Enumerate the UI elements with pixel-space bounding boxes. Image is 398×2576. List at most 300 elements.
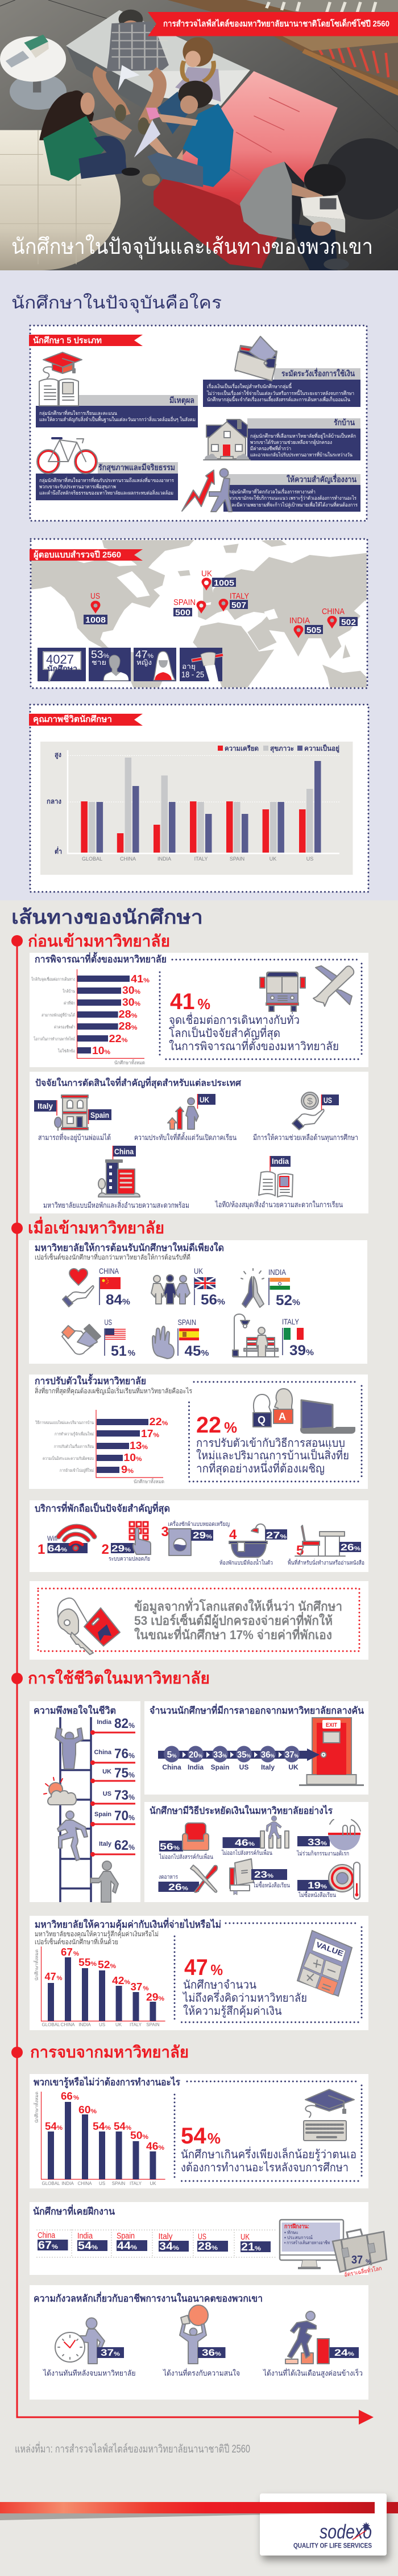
concern: job right after graduating: ได้งานทันทีหลังจบมหาวิทยาลัย [43, 2369, 136, 2377]
saving 2: travel [221, 1816, 289, 1857]
stat: age 18-25: 18 - 25 [181, 670, 204, 680]
horizontal bar chart: hardest things: การทำความรู้จักเพื่อนใหม่ [55, 1431, 94, 1437]
horizontal bar chart: 30% [122, 997, 140, 1008]
horizontal bar chart: 28% [118, 1020, 138, 1032]
service 1: wifi: Wifi [47, 1534, 57, 1542]
welcome: Spain 45% [152, 1318, 209, 1359]
text: parents pay statistic: 53 เปอร์เซ็นต์มีผู้ปกครองจ่ายค่าที่พักให้ [134, 1611, 333, 1629]
internship: Italy: 34 % [159, 2241, 179, 2253]
grouped bar chart: GLOBAL [82, 856, 102, 862]
panel: university location considerations: การพิจารณาที่ตั้งของมหาวิทยาลัย [35, 952, 167, 965]
stat: age 18-25 [180, 648, 223, 681]
service 3: washing machine [161, 1520, 230, 1556]
bar chart: value by country: INDIA [78, 2022, 91, 2027]
service 2: security: 29 % [111, 1543, 131, 1554]
welcome: US 51% [62, 1318, 135, 1359]
ladder values: 82% [114, 1716, 135, 1731]
ladder values: UK [102, 1768, 111, 1775]
ladder values: 62% [114, 1838, 135, 1853]
dropout arrow: China [162, 1763, 181, 1771]
service 3: washing machine: 3 [161, 1524, 169, 1540]
stat: 47% female [134, 648, 176, 681]
saving 1: going out [159, 1823, 213, 1861]
pin: India 505: 505 [306, 626, 321, 635]
service 5: study desk [288, 1525, 364, 1566]
horizontal bar chart: hardest things: 10% [124, 1452, 142, 1463]
pin: US 1008: US [90, 591, 100, 601]
panel: five student types [29, 326, 367, 521]
ladder values: China [94, 1749, 112, 1756]
bar chart: career clarity: GLOBAL [42, 2181, 60, 2186]
callout: 41 percent: จุดเชื่อมต่อการเดินทางกับทั่ว [169, 1012, 300, 1027]
stage heading: before university: ก่อนเข้ามหาวิทยาลัย [28, 932, 170, 950]
internship: Italy: Italy [158, 2232, 173, 2241]
ladder values: 73% [114, 1788, 135, 1803]
panel: value for money [30, 1916, 368, 2030]
bar chart: career clarity: นักศึกษาทั้งหมด [34, 2092, 39, 2123]
bar chart: career clarity: 54% [93, 2121, 111, 2132]
internship: US: 28 % [198, 2241, 218, 2253]
pin: Italy 507 [218, 591, 249, 611]
service 4: en-suite bath: 27 % [266, 1530, 287, 1541]
icon: person climbing [57, 1811, 88, 1861]
welcome: UK 56%: UK [194, 1266, 204, 1275]
internship: India [77, 2231, 107, 2252]
bar chart: value by country: 29% [146, 1991, 164, 2003]
welcome: UK 56%: 56% [201, 1292, 225, 1308]
legend [218, 744, 339, 753]
icon: person standing below ladder [90, 1861, 118, 1902]
saving 4: skip meals: งดอาหาร [159, 1874, 178, 1880]
card: careful with money: ไม่ว่าจะเป็นเรื่องค่าใช้จ่ายในแต่ละวันหรือการหนี้ในระยะยาวหลังจบการศึกษา [206, 389, 354, 396]
footer band and logo card [0, 2493, 398, 2556]
saving 2: travel: ไม่ออกไปสังสรรค์กับเพื่อน [221, 1849, 272, 1857]
welcome: India 52%: 52% [276, 1293, 300, 1308]
text: parents pay statistic: ในขณะที่นักศึกษา 17% จ่ายค่าที่พักเอง [134, 1626, 332, 1642]
panel: internships [30, 2202, 387, 2278]
stat: 4027 students: นักศึกษา [47, 664, 77, 673]
heading: student journey: เส้นทางของนักศึกษา [11, 907, 203, 928]
factor: India: ไอที0/ห้องสมุด/สิ่งอำนวยความสะดวกในการเรียน [215, 1200, 343, 1209]
pin: Italy 507: ITALY [230, 591, 249, 601]
panel: adapting to university: การปรับตัวในรั้วมหาวิทยาลัย [35, 1373, 146, 1386]
card: career focused [223, 474, 360, 512]
service 4: en-suite bath: 4 [229, 1527, 237, 1542]
icon: value calculator: VALUE [315, 1940, 345, 1958]
callout: 41 percent: ในการพิจารณาที่ตั้งของมหาวิทยาลัย [169, 1038, 339, 1053]
welcome: Italy 39%: ITALY [282, 1317, 300, 1326]
internship: UK [241, 2232, 271, 2253]
grouped bar chart: ITALY [194, 856, 208, 862]
icon: airplane [313, 966, 354, 1006]
card: career focused: ให้ความสำคัญเรื่องงาน [287, 474, 356, 484]
horizontal bar chart: โอกาสในการทำงานพาร์ทไทม์ [34, 1036, 75, 1042]
icon: briefcase 37 percent [333, 2229, 387, 2278]
service 5: study desk: พื้นที่สำหรับนั่งทำงานหรืออ่านหนังสือ [288, 1558, 364, 1566]
text: Q A: A [279, 1411, 286, 1422]
card: health and ethics [36, 462, 178, 500]
service 2: security [101, 1522, 151, 1562]
panel: internships: นักศึกษาที่เคยฝึกงาน [33, 2204, 115, 2217]
welcome: India 52% [241, 1268, 300, 1308]
bar chart: value by country: 67% [61, 1947, 79, 1958]
panel: decision factors per country: ปัจจัยในการตัดสินใจที่สำคัญที่สุดสำหรับแต่ละประเทศ [35, 1076, 242, 1089]
horizontal bar chart: ค่าครองชีพต่ำ [54, 1024, 75, 1030]
service 5: study desk: 5 [296, 1543, 304, 1558]
card: home lover: กลุ่มนักศึกษาที่เลือกมหาวิทยาลัยที่อยู่ใกล้บ้านเป็นหลัก [250, 432, 356, 439]
concern: job right after graduating [43, 2318, 136, 2377]
pin: India 505: INDIA [289, 616, 310, 626]
sodexo logo [293, 2521, 372, 2550]
panel: accommodation services: บริการที่พักถือเป็นปัจจัยสำคัญที่สุด [35, 1501, 170, 1515]
ladder values: 70% [114, 1808, 135, 1824]
stage heading: graduating: การจบจากมหาวิทยาลัย [30, 2043, 189, 2061]
callout: 54 percent: งต้องการทำงานอะไรหลังจบการศึกษา [181, 2161, 349, 2174]
factor: Italy and Spain: Spain [90, 1110, 109, 1120]
sodexo logo: sodexo [320, 2521, 372, 2543]
saving 5: textbooks: 23 % [254, 1869, 273, 1880]
concern: job right after graduating: 37 % [101, 2347, 120, 2358]
horizontal bar chart: hardest things: 13% [130, 1440, 148, 1451]
dropout arrow: 33% [213, 1750, 227, 1760]
grouped bar chart: ต่ำ [55, 846, 62, 855]
card: home lover [247, 418, 360, 460]
card: health and ethics: กลุ่มนักศึกษาที่สนใจอาหารที่ตนรับประทานรวมถึงแหล่งที่มาของอาหาร [39, 476, 174, 484]
factor: UK: ความประทับใจที่ดีตั้งแต่วันเปิดภาคเรียน [134, 1132, 237, 1142]
pin: Spain 500: SPAIN [173, 598, 196, 607]
horizontal bar chart: 22% [109, 1033, 128, 1044]
grouped bar chart: CHINA [120, 856, 136, 862]
service 5: study desk: 26 % [341, 1542, 360, 1553]
callout: 22 percent [196, 1413, 349, 1476]
icon: key and tag [57, 1598, 120, 1655]
saving 5: textbooks [230, 1859, 290, 1895]
bar chart: value by country: ITALY [130, 2022, 142, 2027]
panel: adapting to university [29, 1373, 368, 1489]
heading: who are students today: นักศึกษาในปัจจุบันคือใคร [11, 293, 222, 314]
stage heading: university life: การใช้ชีวิตในมหาวิทยาลัย [28, 1669, 210, 1687]
horizontal bar chart: 10% [92, 1045, 110, 1056]
dropout arrow: US [239, 1763, 248, 1771]
dropout arrow: 36% [261, 1750, 275, 1760]
horizontal bar chart: hardest things: 22% [149, 1416, 168, 1427]
internship: UK: UK [241, 2232, 250, 2242]
service 1: wifi: 1 [38, 1542, 45, 1557]
factor: Italy and Spain: Italy [38, 1101, 53, 1110]
grouped bar chart: SPAIN [230, 856, 244, 862]
horizontal bar chart: สามารถพักอยู่ที่บ้านได้ [42, 1012, 75, 1018]
callout: 22 percent: การปรับตัวเข้ากับวิธีการสอนแบบ [196, 1437, 345, 1450]
bar chart: value by country: 52% [98, 1959, 116, 1970]
panel: do they know what job they want: พวกเขารู้หรือไม่ว่าต้องการทำงานอะไร [34, 2076, 181, 2089]
ribbon: respondents: ผู้ตอบแบบสำรวจปี 2560 [34, 550, 121, 560]
factor: US: $ [307, 1097, 313, 1106]
saving 5: textbooks: ไม่ซื้อหนังสือเรียน [252, 1881, 290, 1889]
panel: adapting to university: สิ่งที่ยากที่สุดที่คุณต้องเผชิญเมื่อเริ่มเรียนที่มหาวิทยาลัยคืออะไร [35, 1386, 192, 1396]
bar chart: value by country: CHINA [61, 2022, 75, 2027]
panel: university location considerations [30, 952, 368, 1067]
callout: 47 percent [182, 1955, 307, 2018]
panel: student quality of life chart [29, 705, 368, 892]
saving 1: going out: 56 % [160, 1841, 180, 1852]
internship: US [197, 2232, 228, 2253]
card: health and ethics: รักสุขภาพและมีจริยธรรม [98, 463, 175, 472]
bar chart: career clarity: ITALY [130, 2181, 142, 2186]
panel: how students save money [144, 1802, 368, 1902]
legend: สุขภาวะ [270, 744, 294, 753]
icon: wallet [235, 336, 277, 381]
icon: laptop [301, 1400, 355, 1433]
text: parents pay statistic: ข้อมูลจากทั่วโลกแสดงให้เห็นว่า นักศึกษา [134, 1597, 342, 1615]
panel: value for money: เปอร์เซ็นต์ของนักศึกษาที่เห็นด้วย [35, 1937, 118, 1946]
horizontal bar chart: hardest things: ความเป็นอิสระและความรับผิดชอบ [43, 1455, 94, 1461]
panel: do they know what job they want [30, 2074, 368, 2188]
stat: 47% female: หญิง [136, 659, 152, 666]
bar chart: value by country [34, 1947, 165, 2027]
service 3: washing machine: 29 % [193, 1530, 212, 1541]
internship: India: India [77, 2231, 93, 2241]
pin: UK 1005 [201, 569, 236, 591]
horizontal bar chart: hardest things: 9% [121, 1464, 134, 1475]
bar chart: career clarity: 54% [114, 2121, 131, 2132]
icon: briefcase 37 percent: 37 % [351, 2254, 371, 2266]
horizontal bar chart: hardest things: นักศึกษาทั้งหมด [134, 1478, 164, 1484]
ribbon: five types: นักศึกษา 5 ประเภท [33, 335, 102, 345]
saving 6: heating: ไม่ซื้อหนังสือเรียน [298, 1891, 336, 1899]
stat: 53% male: 53% [91, 649, 109, 660]
ladder values: 76% [114, 1746, 135, 1762]
stat: 53% male: ชาย [92, 659, 106, 666]
ladder values: Italy [99, 1841, 112, 1847]
ladder values: US [103, 1791, 111, 1797]
factor: China [43, 1146, 189, 1209]
factor: US: US [324, 1096, 332, 1105]
callout: 47 percent: ให้ความรู้สึกคุ้มค่าเงิน [183, 2005, 282, 2018]
welcome: China 84%: CHINA [99, 1266, 119, 1275]
service 1: wifi: 64 % [48, 1543, 67, 1554]
panel: career concerns: ความกังวลหลักเกี่ยวกับอาชีพการงานในอนาคตของพวกเขา [34, 2291, 263, 2304]
dropout arrow: 35% [237, 1750, 251, 1760]
welcome: US 51%: 51% [111, 1343, 135, 1359]
bar chart: career clarity: 60% [78, 2104, 97, 2116]
panel: value for money: มหาวิทยาลัยให้ความคุ้มค่ากับเงินที่จ่ายไปหรือไม่ [35, 1917, 221, 1931]
panel: dropout rate [144, 1701, 368, 1795]
card: rational: กลุ่มนักศึกษาที่สนใจการเรียนและคะแนน [39, 409, 117, 417]
saving 3: sports [296, 1820, 360, 1857]
welcome: Italy 39%: 39% [289, 1343, 314, 1359]
text: Q A: Q [258, 1414, 266, 1426]
internship: UK: 21 % [241, 2241, 261, 2253]
ribbon: quality of life [29, 714, 143, 726]
panel: welcome by country: มหาวิทยาลัยให้การต้อนรับนักศึกษาใหม่ดีเพียงใด [35, 1242, 224, 1253]
card: career focused: และมีความพยายามที่จะก้าวไปสู่เป้าหมายเพื่อให้ได้งานที่ตนต้องการ [229, 501, 358, 508]
ribbon: five types [29, 335, 143, 346]
panel: welcome by country [29, 1240, 367, 1364]
factor: India: India [272, 1157, 289, 1166]
panel: how students save money: นักศึกษามีวิธีประหยัดเงินในมหาวิทยาลัยอย่างไร [150, 1805, 333, 1816]
factor: China: China [114, 1147, 134, 1156]
dropout arrow: Spain [211, 1763, 229, 1771]
panel: life satisfaction ladder: ความพึงพอใจในชีวิต [34, 1705, 116, 1716]
panel: life satisfaction ladder [30, 1701, 140, 1902]
timeline with arrow [11, 935, 374, 2425]
pin: Italy 507: 507 [231, 600, 246, 610]
horizontal bar chart: 28% [118, 1009, 138, 1020]
horizontal bar chart: ใกล้บ้าน [63, 989, 75, 994]
grouped bar chart: INDIA [157, 856, 171, 862]
icon: monitor with internship benefits: ▪ ประสบการณ์ [284, 2235, 313, 2240]
bar chart: value by country: GLOBAL [42, 2022, 60, 2027]
saving 6: heating: 19 % [308, 1880, 327, 1891]
callout: 54 percent: 54% [181, 2124, 221, 2149]
concern: high salary soon: ได้งานที่ได้เงินเดือนสูงค่อนข้างเร็ว [263, 2368, 363, 2378]
bar chart: value by country: UK [115, 2022, 122, 2027]
callout: 47 percent: 47% [184, 1955, 223, 1980]
grouped bar chart: US [306, 856, 313, 862]
icon: exit door: EXIT [326, 1722, 337, 1729]
legend: ความเป็นอยู่ [304, 744, 339, 753]
horizontal bar chart: นักศึกษาทั้งหมด [114, 1059, 145, 1065]
service 2: security: ระบบความปลอดภัย [109, 1556, 150, 1562]
internship: US: US [198, 2232, 206, 2241]
dropout arrow: 20% [189, 1750, 202, 1760]
welcome: US 51%: US [105, 1318, 112, 1327]
dropout arrow: India [188, 1763, 204, 1771]
welcome: Italy 39% [233, 1314, 314, 1359]
callout: 22 percent: ใหม่และปริมาณการบ้านเป็นสิ่งที่ย [196, 1447, 349, 1462]
saving 6: heating [297, 1862, 360, 1899]
card: rational: มีเหตุผล [169, 396, 194, 405]
grouped bar chart [40, 742, 353, 875]
sodexo logo: QUALITY OF LIFE SERVICES [293, 2542, 372, 2550]
concern: job matching interest: ได้งานที่ตรงกับความสนใจ [163, 2368, 240, 2377]
icon: question and answer heads [253, 1389, 293, 1427]
panel: decision factors per country [30, 1072, 368, 1213]
horizontal bar chart: 41% [131, 973, 150, 985]
pin: China 502 [322, 607, 358, 628]
pin: China 502: CHINA [322, 607, 345, 616]
pin: UK 1005: UK [201, 569, 212, 578]
horizontal bar chart: hardest things [35, 1410, 168, 1484]
callout: 54 percent [181, 2124, 356, 2174]
bar chart: career clarity: 46% [146, 2141, 164, 2152]
service 2: security: 2 [101, 1542, 109, 1557]
ribbon: respondents [30, 549, 143, 561]
internship: India: 54 % [78, 2240, 98, 2252]
welcome: China 84%: 84% [106, 1292, 130, 1308]
internship: China [38, 2231, 68, 2252]
factor: Italy and Spain: สามารถที่จะอยู่บ้านพ่อแม่ได้ [38, 1133, 111, 1142]
service 4: en-suite bath [219, 1524, 287, 1566]
stat: 4027 students: 4027 [46, 652, 74, 666]
stat: 53% male [89, 648, 131, 681]
card: career focused: กลุ่มนักศึกษาที่วิตกกังวลในเรื่องการหางานทำ [229, 488, 316, 495]
service 1: wifi [38, 1526, 94, 1557]
text: parents pay statistic [134, 1597, 342, 1642]
pin: UK 1005: 1005 [214, 578, 234, 588]
world map [31, 538, 368, 691]
pin: US 1008 [84, 591, 107, 625]
bar chart: career clarity: US [99, 2181, 105, 2186]
panel: career concerns [30, 2285, 368, 2400]
bar chart: value by country: 37% [131, 1981, 149, 1993]
saving 3: sports: ไม่ร่วมกิจกรรมงานอดิเรก [296, 1850, 349, 1857]
card: home lover: รักบ้าน [334, 418, 355, 427]
card: home lover: มีค่าครองชีพที่ต่ำกว่า [250, 445, 291, 451]
saving 1: going out: ไม่ออกไปสังสรรค์กับเพื่อน [159, 1853, 213, 1861]
horizontal bar chart [31, 969, 150, 1065]
page background: upper section [0, 270, 398, 900]
callout: 41 percent: 41% [170, 989, 210, 1014]
ribbon: quality of life: คุณภาพชีวิตนักศึกษา [33, 714, 112, 725]
panel: who pays for accommodation [30, 1581, 368, 1660]
factor: UK: UK [200, 1095, 209, 1104]
callout: 47 percent: นักศึกษาจำนวน [183, 1979, 256, 1991]
stat: 47% female: 47% [135, 649, 154, 660]
panel: dropout rate: จำนวนนักศึกษาที่มีการลาออกจากมหาวิทยาลัยกลางคัน [150, 1703, 364, 1716]
page background: journey section [0, 900, 398, 2576]
card: rational [36, 395, 198, 427]
dropout arrow: UK [288, 1763, 298, 1771]
callout: 22 percent: ากที่สุดอย่างหนึ่งที่ต้องเผชิญ [196, 1460, 325, 1476]
panel: survey respondents map [30, 538, 368, 691]
stat: age 18-25: อายุ [182, 662, 196, 671]
horizontal bar chart: hardest things: 17% [141, 1428, 159, 1439]
factor: US [253, 1092, 358, 1142]
grouped bar chart: UK [270, 856, 276, 862]
icon: bus [260, 972, 305, 1011]
source note: แหล่งที่มา: การสำรวจไลฟ์สไตล์ของมหาวิทยาลัยนานาชาติปี 2560 [15, 2441, 250, 2455]
bar chart: value by country: US [99, 2022, 105, 2027]
icon: briefcase 37 percent: อัตราเฉลี่ยทั่วโลก [343, 2264, 383, 2278]
service 4: en-suite bath: ห้องพักแบบมีห้องน้ำในตัว [219, 1558, 273, 1566]
card: home lover: พวกเขาได้รับความช่วยเหลือจากผู้ปกครอง [250, 439, 332, 446]
horizontal bar chart: hardest things: การปรับตัวในเรื่องการเรียน [54, 1443, 94, 1449]
welcome: UK 56% [151, 1266, 225, 1308]
welcome: India 52%: INDIA [268, 1268, 287, 1277]
internship: China: China [38, 2231, 56, 2240]
pin: Spain 500: 500 [175, 608, 190, 618]
horizontal bar chart: ค่าที่พัก [64, 1000, 75, 1006]
panel: accommodation services [30, 1500, 368, 1572]
ladder values: Spain [94, 1811, 111, 1818]
text: Q A [258, 1411, 286, 1426]
internship: Spain: Spain [117, 2231, 135, 2241]
panel: welcome by country: เปอร์เซ็นต์ของนักศึกษาที่บอกว่ามหาวิทยาลัยให้การต้อนรับที่ดี [35, 1252, 190, 1261]
icon: bicycle [37, 438, 97, 474]
card: health and ethics: และคำนึงถึงหลักจริยธรรมของมหาวิทยาลัยและผลกระทบต่อสิ่งแวดล้อม [39, 489, 173, 496]
dropout arrow: 37% [285, 1750, 298, 1760]
icon: person at top of ladder [55, 1728, 83, 1769]
horizontal bar chart: ไม่ใช่สักข้อ [57, 1048, 75, 1054]
icon: graduation cap on book [39, 352, 82, 406]
card: rational: และให้ความสำคัญกับสิ่งจำเป็นพื้นฐานในแต่ละวันมากกว่าสิ่งแวดล้อมอื่นๆ ในสังคม [39, 415, 196, 423]
pin: India 505 [289, 616, 323, 638]
horizontal bar chart: hardest things: วิธีการสอนแบบใหม่และปริมาณการบ้าน [35, 1420, 94, 1425]
dropout arrow [158, 1746, 326, 1771]
ladder values [94, 1716, 135, 1853]
concern: high salary soon: 24 % [334, 2347, 354, 2358]
hero photo: students in library lounge [0, 0, 398, 270]
grouped bar chart: กลาง [47, 797, 61, 805]
concern: job matching interest [163, 2305, 240, 2377]
icon: house [204, 419, 250, 460]
card: careful with money: นักศึกษากลุ่มนี้จะจำกัดเรื่องงานเลี้ยงสังสรรค์และการเดินทางเพื่อเก็บออมเงิน [207, 396, 350, 403]
bar chart: career clarity: CHINA [78, 2181, 92, 2186]
concern: job matching interest: 36 % [202, 2347, 221, 2358]
callout: 41 percent: โลกเป็นปัจจัยสำคัญที่สุด [169, 1025, 280, 1040]
bar chart: value by country: SPAIN [146, 2022, 160, 2027]
